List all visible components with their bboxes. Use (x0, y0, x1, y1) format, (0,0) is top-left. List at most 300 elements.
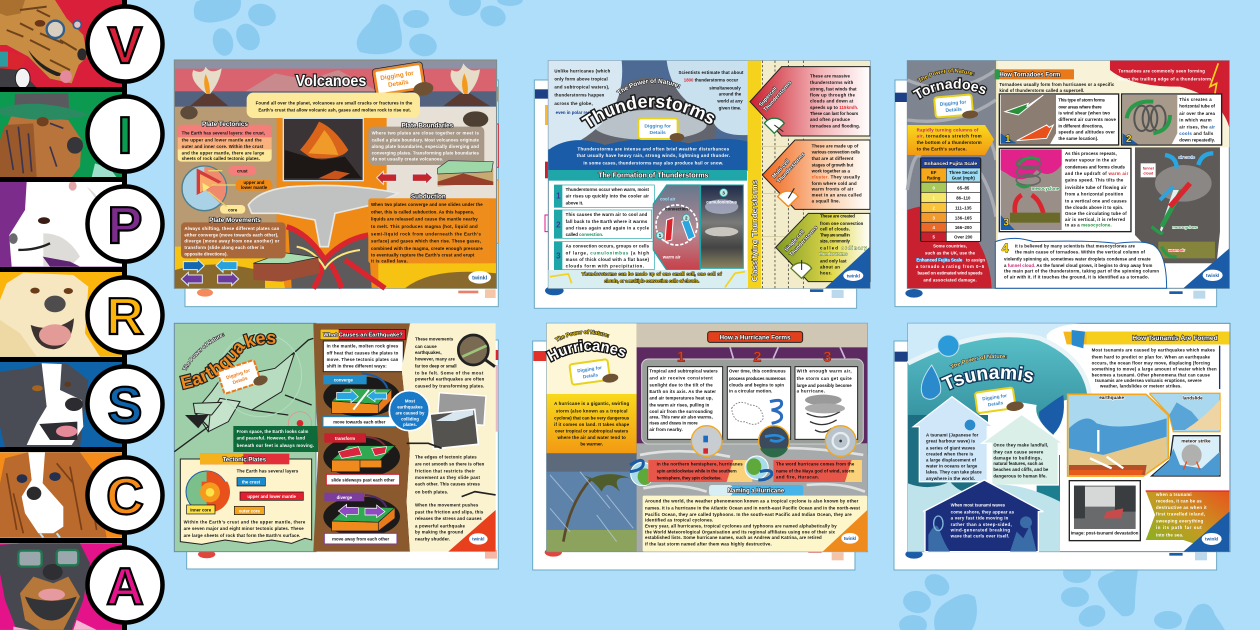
callout: from space (233, 426, 318, 452)
house: landfall: they can cause severe (993, 449, 1044, 454)
card: single-cell: They are small in (820, 233, 850, 238)
heading: The Formation of Thunderstorms: The Formation of Thunderstorms (598, 173, 709, 180)
step 4: the main cause of tornadoes. Within the vertical column of (1015, 250, 1146, 255)
step 3: gains speed. This tilts the (1065, 178, 1124, 183)
step 2: clouds and begins to spin (729, 383, 784, 388)
step 4: the main part of the thunderstorm, taking part of the spinning column (1004, 269, 1159, 274)
band: V dog on red (0, 0, 123, 88)
box: Plate Movements text: Always shifting, these different plates can (184, 226, 280, 231)
step 2: air rises, the air (1179, 124, 1215, 129)
heading: How a Hurricane Forms: How a Hurricane Forms (719, 335, 791, 342)
wave (908, 323, 1090, 552)
step 2: 2 (1126, 134, 1132, 145)
card: supercell: flow up through the (810, 92, 856, 97)
text: release: by making the ground (415, 530, 464, 535)
house: what is a tsunami (913, 397, 993, 482)
step 2: air over the area (1179, 111, 1216, 116)
card: supercell: Thunderstorms (763, 80, 793, 113)
diagram: meteor strike: meteor strike (1181, 439, 1211, 444)
labels: crust, mantle, core: core (228, 207, 238, 212)
heading: Naming a Hurricane (709, 485, 803, 496)
step 3 (554, 242, 654, 270)
lava photo (283, 118, 363, 181)
box: Plate Movements text: diverge (move away from one another) or (184, 239, 280, 244)
text: movements: caused by transforming plates. (415, 384, 484, 389)
text: movements (415, 337, 485, 389)
title: Tsunamis (939, 364, 1035, 391)
ash plume (248, 185, 398, 247)
icon: magnifier photo (458, 335, 495, 367)
callout: word origin: The word hurricane comes from the (776, 462, 855, 467)
panel: naming text: if the last storm named after them was highly destructive. (645, 542, 772, 547)
heading: How Tsunamis Are Formed: How Tsunamis Are Formed (1132, 335, 1218, 342)
band: C dog on orange (0, 452, 123, 538)
step 2: process produces numerous (729, 376, 786, 381)
box: Subduction text: liquids are released and cause the mantle nearby (371, 217, 478, 222)
red corner: along the trailing edge of a thunderstorm. (1117, 77, 1212, 82)
step 1: area. This new air also warms, (649, 415, 713, 420)
panel: definition: storm (also known as a tropical (556, 408, 627, 413)
heading: How Tornadoes Form (995, 69, 1074, 79)
callout: hemispheres: spin anticlockwise while in the southern (657, 469, 737, 474)
callout: from space: From space, the Earth looks calm (237, 429, 308, 434)
callout: from space: beneath our feet is always moving. (237, 443, 314, 448)
step 3 (999, 148, 1131, 232)
card: single-cell: about an (820, 264, 840, 269)
step 3: to as a mesocyclone. (1065, 223, 1112, 228)
card: supercell: Supercell (758, 86, 779, 108)
table: Enhanced Fujita Scale: 0 (932, 185, 935, 190)
heading: What Causes an Earthquake: What Causes an Earthquake? (323, 333, 403, 339)
callout: transform plates: plates. (403, 422, 417, 427)
foam splashes (908, 482, 1060, 552)
storm photo: cumulonimbus (706, 199, 738, 204)
card: supercell: strong, fast winds that (810, 86, 857, 91)
panel: naming text: the World Meteorological Organisation and its regional affiliates using one of their six (645, 529, 836, 534)
house: landfall (982, 414, 1063, 485)
panel: tectonic plates: Tectonic Plates (223, 458, 267, 464)
step 3: water vapour in the air (1064, 158, 1117, 163)
badge: Digging for Details (372, 60, 434, 103)
text: tsunami causes: them hard to predict or plan for. When an earthquake (1092, 354, 1211, 359)
step 1: over areas where there (1058, 104, 1102, 109)
panel: tectonic plates: upper and lower mantle (247, 494, 297, 499)
worksheet: Thunderstorms (534, 60, 870, 309)
diagram: landslide (1150, 393, 1220, 432)
house: what is a tsunami: lakes. They can take place (926, 469, 982, 474)
card: multi-cell: stages of growth but (812, 162, 854, 167)
card: supercell: These can last for hours (810, 111, 859, 116)
step 1: air rises up quickly into the cooler air (566, 194, 649, 199)
step 3: With enough warm air, (797, 369, 852, 374)
arrow: definition: the bottom of a thunderstorm (917, 140, 982, 145)
badge: Digging for Details: Details (388, 79, 410, 89)
heading: Plate Movements: Plate Movements (209, 217, 261, 224)
step 2 (727, 367, 791, 439)
text: intro right: Scientists estimate that about (678, 70, 744, 75)
text: release: nearby shudder. (415, 537, 450, 542)
photo: tsunami damage (1069, 481, 1140, 541)
back page (187, 340, 498, 569)
text: tornado intro: Tornadoes usually form from hurricanes or a specific (999, 82, 1115, 87)
band: P dog on purple (0, 181, 123, 267)
numbers 1 2 3 (677, 350, 831, 366)
text: intro left: only form above tropical (554, 77, 608, 82)
text: intro left: across the globe, (554, 101, 593, 106)
card: multi-cell: cluster. They usually (812, 175, 861, 180)
step 2: called convection. (566, 232, 603, 237)
house: what is a tsunami: anywhere in the world. (926, 476, 975, 481)
corner: twinkl logo (448, 510, 496, 552)
photo: palm in storm (547, 453, 637, 552)
step 2: Over time, this continuous (729, 369, 786, 374)
labels: crust, mantle, core: upper and (244, 180, 265, 185)
corner: twinkl logo (825, 247, 870, 288)
step 1: cool air from the surrounding (649, 409, 713, 414)
box: Plate Boundaries text: converging plates. Transforming plate boundaries (372, 150, 480, 155)
callout: word origin: and fire, Huracan. (776, 474, 819, 479)
text: scale explanation: to assign (966, 257, 985, 262)
house: what is a tsunami: a large displacement of (926, 457, 977, 462)
card: single-cell: size, commonly (820, 239, 851, 244)
text: causes (323, 341, 403, 372)
rock icon right (463, 111, 488, 127)
badge: Digging for Details (569, 358, 619, 388)
house: what is a tsunami: A tsunami (Japanese for (926, 433, 979, 438)
tornado photo: cloud (1143, 172, 1153, 176)
card: multi-cell: Thunderstorms (776, 152, 807, 185)
callout: destruction: recedes, it can be as (1156, 498, 1202, 503)
badge: Digging for Details: Details (232, 375, 249, 385)
text: movements: powerful earthquakes are often (415, 377, 485, 382)
panel: tectonic plates: are seven major and eight minor tectonic plates. These (184, 526, 304, 531)
step 2: This creates a (1179, 97, 1212, 102)
callout: hemispheres: In the northern hemisphere, hurricanes (657, 462, 743, 467)
box: Plate Boundaries text: along plate boundaries, especially diverging and (372, 144, 479, 149)
step 1: the warm air rises, pulling in (649, 402, 710, 407)
text: friction: each other. This causes stress (415, 482, 481, 487)
panel: definition: where the air and water tend to (556, 435, 626, 440)
callout: destruction (1146, 491, 1229, 552)
text: intro left: and subtropical waters), (554, 85, 609, 90)
callout: destruction: when a tsunami (1155, 492, 1192, 497)
text: tornado intro: kind of thunderstorm called a supercell. (999, 88, 1084, 93)
step 1: 1 (556, 191, 561, 200)
box: Subduction text: surface) and gases which then rise. These gases, (371, 239, 481, 244)
panel: definition (547, 394, 637, 453)
step 3: 3 (556, 252, 561, 261)
numbers 1 2 3: 1 (677, 350, 685, 366)
front page background (174, 60, 497, 288)
badge: Digging for Details (638, 118, 684, 142)
step 4 (995, 238, 1167, 288)
step 1: 1 (1005, 134, 1011, 145)
box: Plate Tectonics text: the upper and lower mantle and the (182, 137, 262, 142)
heading: The Formation of Thunderstorms (548, 170, 747, 181)
worksheet: Tornadoes (894, 60, 1230, 308)
arrows: plate movement (181, 259, 239, 286)
step 1: air from nearby. (649, 427, 683, 432)
step 4: a funnel cloud. As the funnel cloud grows, it begins to drop away from (1004, 263, 1152, 268)
tornado photo: air cools (1178, 154, 1196, 159)
step 1: Earth on its axis. As the water (649, 389, 716, 394)
card: single-cell: called ordinary (820, 245, 867, 250)
badge letter S: S (108, 377, 142, 435)
panel: naming text: Pacific Ocean, they are called typhoons. In the south-east Pacific and Indian Ocean, they are (645, 512, 852, 517)
card: single-cell (776, 213, 870, 282)
back page (533, 341, 855, 570)
crack line (407, 443, 496, 497)
storm sky (548, 61, 748, 171)
callout: destruction: in its path far out (1156, 525, 1202, 530)
box: Plate Tectonics text: sheets of rock called tectonic plates. (182, 156, 260, 161)
text: scale explanation: Some countries, (933, 243, 967, 248)
text: tsunami causes: something to move) a large amount of water which then (1092, 367, 1217, 372)
block diagram: subduction (253, 253, 320, 282)
step 1 (648, 367, 723, 439)
step 1: in different directions, (1058, 123, 1103, 128)
step 3: the storm can get quite (797, 376, 852, 381)
text: intro right: simultaneously (709, 85, 741, 90)
step 4: 4 (1002, 242, 1009, 256)
diagram: converge: move towards each other (333, 420, 386, 425)
house: landfall: dangerous to human life. (993, 474, 1047, 479)
step 1 (554, 185, 654, 207)
step 4: violently spinning air, sometimes water droplets condense and create (1004, 257, 1151, 262)
worksheet: Volcanoes (174, 60, 498, 307)
card: multi-cell: These are made up of (812, 144, 859, 149)
red corner: Tornadoes are commonly seen forming (1118, 68, 1205, 73)
subtitle: The Power of Nature: (949, 354, 1008, 370)
house: what is a tsunami: created when there is (926, 451, 974, 456)
back page (185, 80, 498, 307)
text: release: past the friction and slips, this (415, 509, 484, 514)
badge letter C: C (106, 468, 144, 526)
diagram: transform (324, 433, 400, 485)
box: Subduction text: combined with the magma, create enough pressure (371, 246, 483, 251)
house: tidal waves: rather than a steep-sided, (951, 522, 1012, 527)
box: Subduction text: When two plates converge and one slides under the (371, 202, 483, 207)
intro text box (247, 93, 420, 118)
badge: Digging for Details: Details (988, 400, 1004, 407)
house: what is a tsunami: a series of giant waves (926, 445, 976, 450)
diagram: meteor strike (1152, 436, 1220, 476)
card: single-cell: cell of clouds. (820, 227, 850, 232)
step 3: of large, cumulonimbus (a high (566, 250, 649, 255)
step 3: mesocyclone (1032, 186, 1060, 191)
text: causes: shift in three different ways: (327, 364, 387, 369)
diagram: earthquake (1068, 394, 1168, 476)
photos: cracked ground (430, 393, 486, 449)
callout strip: clouds, or a multiple convection cells of clouds. (604, 279, 699, 284)
box: Plate Tectonics text: The Earth has several layers: the crust, (182, 131, 265, 136)
heading: Plate Tectonics: Plate Tectonics (202, 121, 248, 128)
ground and lava (175, 227, 496, 288)
badge: Digging for Details: Digging for (982, 393, 1007, 401)
step 3: air is vertical, it is referred (1065, 217, 1125, 222)
card: supercell (750, 67, 870, 136)
panel: definition: A hurricane is a gigantic, swirling (554, 401, 630, 406)
callout: hemispheres (648, 460, 752, 482)
panel: definition: be warmer. (580, 442, 603, 447)
box: Plate Boundaries text: Where two plates are close together or meet is (372, 131, 480, 136)
callout: destruction: sweeping everything (1156, 518, 1204, 523)
card: supercell: clouds and down at (810, 99, 854, 104)
callout strip: Thunderstorms can be made up of one small cell, one cell of (582, 272, 722, 277)
map strip (637, 323, 867, 347)
storm photo: 3 (722, 190, 725, 195)
band: I dog on green (0, 92, 123, 177)
badge letter I: I (118, 107, 132, 165)
title: Earthquakes (179, 332, 277, 390)
badge: Digging for Details (217, 358, 269, 397)
purple backdrop (637, 347, 867, 455)
tornado photo: mesocyclone (1172, 224, 1198, 229)
callout strip (548, 270, 747, 288)
badge: Digging for Details: Digging for (644, 123, 671, 129)
text: scale explanation: Enhanced Fujita Scale (916, 257, 963, 262)
table: Enhanced Fujita Scale: Over 200 (954, 234, 973, 239)
card: supercell: speeds up to 115km/h. (810, 105, 858, 110)
heading: How Tornadoes Form: How Tornadoes Form (999, 73, 1060, 79)
panel: tectonic plates: The Earth has several layers (237, 469, 299, 474)
step 2: down repeatedly. (1179, 138, 1215, 143)
step 3: condenses and forms clouds (1065, 164, 1126, 169)
back page (534, 80, 857, 308)
step 3: invisible tube of flowing air (1065, 185, 1127, 190)
panel: tectonic plates: Within the Earth’s crust and the upper mantle, there (184, 519, 306, 524)
front page background (548, 61, 870, 288)
text: scale explanation: based on estimated wind speeds (917, 271, 983, 276)
text: friction: on both plates. (415, 489, 448, 494)
text: friction: are not smooth so there is often (415, 462, 485, 467)
tornado photo: funnel (1143, 166, 1154, 170)
card: multi-cell: work together as a (811, 168, 851, 173)
step 1: Tropical and subtropical waters (649, 368, 718, 373)
step 2: and rises again and again in a cycle (566, 225, 650, 230)
text: friction: friction that restricts their (415, 468, 475, 473)
text: friction: movement as they slide past (415, 475, 481, 480)
callout: from space: and peaceful. However, the land (237, 436, 305, 441)
text: intro left (554, 69, 611, 115)
text: movements: can cause (415, 344, 437, 349)
text: scale explanation: such as the UK, use the (925, 250, 976, 255)
step 3: As this process repeats, (1065, 151, 1117, 156)
red corner (1110, 61, 1229, 127)
text: intro left: thunderstorms happen (554, 93, 605, 98)
badge: Digging for Details: Digging for (380, 70, 415, 82)
text: release: a powerful earthquake (415, 523, 466, 528)
swirl clouds (637, 443, 867, 552)
panel: naming text: identified as tropical cyclones. (645, 518, 713, 523)
callout: destruction: first travelled inland, (1156, 512, 1205, 517)
table: Enhanced Fujita Scale: 1 (932, 195, 935, 200)
text: movements: however, many are (415, 357, 456, 362)
subtitle: The Power of Nature: (182, 332, 225, 371)
right cream panel (402, 323, 496, 552)
arrow: definition: Rapidly turning columns of (917, 128, 979, 133)
storm photo (701, 185, 743, 268)
table: Enhanced Fujita Scale (920, 157, 981, 242)
callout: transform plates: Most (405, 398, 416, 403)
text: tsunami causes: weather, landslides or meteor strikes. (1099, 384, 1182, 389)
step 1: is wind shear (when two (1058, 111, 1110, 116)
text: tsunami causes: Most tsunamis are caused by earthquakes which makes (1092, 347, 1216, 352)
text: movements: earthquakes, (415, 350, 442, 355)
step 2: cools and falls (1179, 131, 1214, 136)
photo: tsunami damage: Image: post-tsunami devastation (1071, 531, 1139, 536)
heading: Naming a Hurricane: Naming a Hurricane (728, 489, 785, 495)
badge letter V (88, 6, 162, 82)
table: Enhanced Fujita Scale: 4 (932, 225, 935, 230)
badge letter R (88, 278, 162, 352)
text: friction: The edges of tectonic plates (415, 454, 477, 459)
card: multi-cell: various convection cells (812, 150, 861, 155)
labels: crust, mantle, core (208, 166, 272, 214)
step 2: fall back to the Earth where it warms (566, 219, 648, 224)
box: Subduction text: other, this is called subduction. As this happens, (371, 209, 474, 214)
text: intro right: world at any (716, 99, 743, 104)
table: Enhanced Fujita Scale: Rating (927, 175, 941, 180)
convection diagram: convection (665, 207, 688, 212)
arrow: definition (907, 125, 994, 155)
step 2: in which warm (1179, 118, 1212, 123)
card: single-cell: These are created (820, 213, 855, 218)
worksheet: Hurricanes (532, 322, 868, 570)
numbers 1 2 3: 3 (823, 350, 831, 366)
box: Plate Tectonics text: outer and inner core. Within the crust (182, 144, 264, 149)
back page (894, 341, 1217, 570)
text: causes: off heat that causes the plates to (327, 350, 399, 355)
panel: definition: cyclone) that can be very dangerous (554, 415, 630, 420)
arrows: plate boundaries (377, 171, 433, 184)
title: Volcanoes (296, 73, 366, 90)
step 3: clouds form with precipitation. (566, 263, 644, 268)
card: single-cell: and only last (820, 258, 847, 263)
subtitle: The Power of Nature: (616, 78, 681, 95)
step 3: 3 (1003, 217, 1009, 228)
photo circles (691, 426, 856, 457)
text: intro right: given time. (719, 105, 741, 110)
step 2: This causes the warm air to cool and (566, 212, 648, 217)
text: intro left: even in polar regions. (556, 110, 600, 115)
logo: twinkl (468, 271, 491, 284)
text: causes: In the mantle, molten rock gives (327, 344, 399, 349)
step 1: rises and draws in more (649, 421, 698, 426)
table: Enhanced Fujita Scale: 3 (932, 215, 935, 220)
card: single-cell: Thunderstorms (789, 225, 819, 258)
card: supercell: and often produce (810, 117, 851, 122)
step 3: large and possibly become (797, 383, 852, 388)
text: tsunami causes: tsunamis are undersea volcanic eruptions, severe (1095, 378, 1202, 383)
panel: tectonic plates: outer core (239, 508, 260, 513)
title: Tornadoes (910, 77, 988, 100)
badge letter V: V (108, 17, 143, 75)
corner: twinkl logo: twinkl (847, 273, 860, 278)
steps frame (642, 359, 863, 444)
front page background (547, 323, 867, 552)
badge letter I (88, 96, 162, 172)
earth icon left (630, 460, 654, 486)
panel: definition: if it comes on land. It takes shape (554, 422, 630, 427)
convection diagram: 2 (685, 216, 688, 221)
diagram: diverge: diverge (337, 495, 353, 500)
lightning (730, 347, 845, 358)
panel: naming text: Around the world, the weather phenomenon known as a tropical cyclone is also known by other (645, 499, 859, 504)
step 1 (999, 94, 1119, 145)
table: Enhanced Fujita Scale: 65–85 (957, 185, 970, 190)
box: Subduction text: semi-liquid rock from underneath the Earth’s (371, 231, 482, 236)
